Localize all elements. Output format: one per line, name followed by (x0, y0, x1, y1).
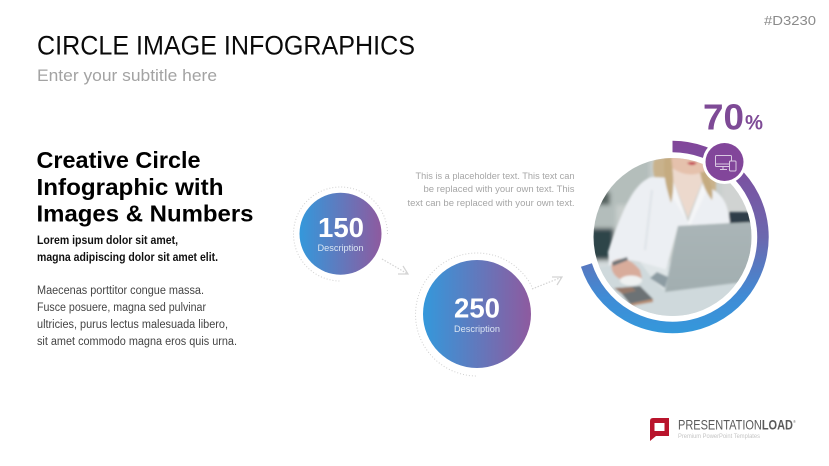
text block: left column (36, 147, 254, 348)
percentage: % (745, 112, 763, 134)
body paragraph (37, 285, 237, 348)
body paragraph: sit amet commodo magna eros quis urna. (37, 336, 237, 348)
title: CIRCLE IMAGE INFOGRAPHICS (37, 30, 415, 60)
arrow: 250 to photo (532, 277, 562, 289)
bold intro: magna adipiscing dolor sit amet elit. (37, 252, 218, 264)
heading: Infographic with (36, 174, 224, 200)
number circle: 250: 250 (454, 292, 500, 324)
progress ring: 70% (586, 146, 763, 328)
body paragraph: Fusce posuere, magna sed pulvinar (37, 302, 206, 314)
hair back (652, 158, 717, 192)
arrow: 150 to 250 (382, 259, 408, 274)
face and neck (672, 168, 703, 217)
document code: #D3230 (764, 14, 816, 28)
placeholder text (408, 171, 575, 209)
placeholder text: be replaced with your own text. This (424, 184, 575, 195)
laptop (665, 222, 752, 292)
bold intro (37, 235, 218, 264)
number circle: 250: Description (454, 324, 500, 335)
body paragraph: ultricies, purus lectus malesuada libero, (37, 319, 228, 331)
icon badge: devices (702, 140, 746, 184)
number circle: 150 (293, 187, 388, 281)
table surface (600, 268, 736, 316)
subtitle: Enter your subtitle here (37, 66, 217, 85)
heading: Images & Numbers (36, 200, 254, 226)
number circle: 150: 150 (318, 212, 364, 243)
logo: PresentationLoad (650, 416, 796, 441)
logo tagline: Premium PowerPoint Templates (678, 434, 760, 440)
number circle: 250 (416, 253, 533, 376)
photo: woman at laptop (594, 158, 752, 316)
shirt (608, 177, 730, 270)
placeholder text: text can be replaced with your own text. (408, 198, 574, 209)
logo mark (650, 418, 669, 441)
phone (617, 286, 653, 304)
body paragraph: Maecenas porttitor congue massa. (37, 285, 204, 297)
hand and mouse (611, 259, 642, 280)
placeholder text: This is a placeholder text. This text can (416, 171, 574, 182)
percentage (703, 96, 763, 138)
hair strands front (664, 155, 713, 203)
logo wordmark: PRESENTATIONLOAD (678, 416, 793, 432)
heading: Creative Circle (36, 147, 200, 173)
percentage: 70 (703, 96, 744, 138)
heading (36, 147, 254, 226)
bold intro: Lorem ipsum dolor sit amet, (37, 235, 178, 247)
registered mark: ® (793, 419, 796, 424)
number circle: 150: Description (318, 243, 364, 254)
